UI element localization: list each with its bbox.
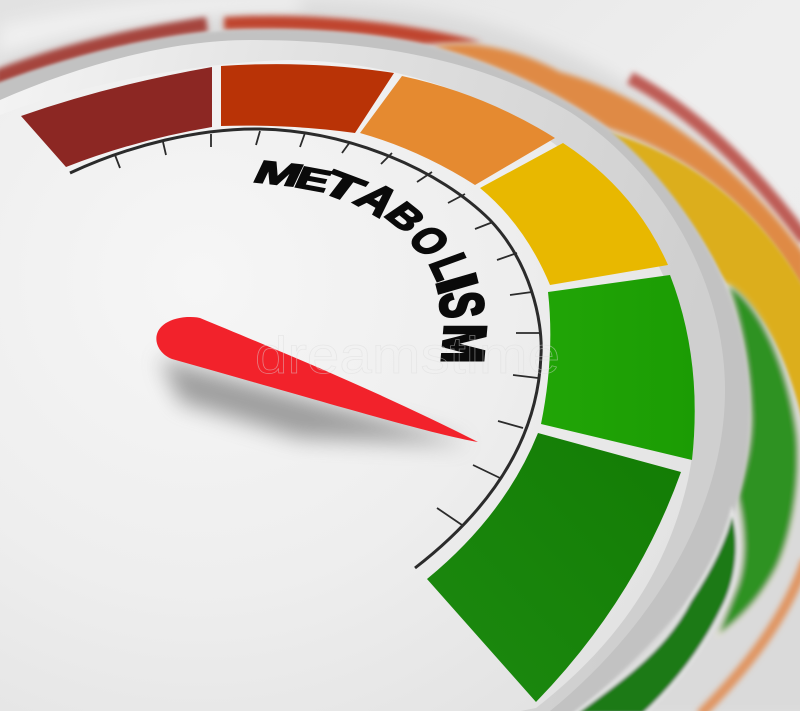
dial face xyxy=(0,60,695,711)
scale arc with ticks xyxy=(70,129,541,568)
segment: dark green xyxy=(427,433,681,702)
needle shadow xyxy=(160,358,470,444)
segment: yellow xyxy=(480,143,668,285)
gauge title: METABOLISM, letters set in perspective along the scale: M xyxy=(248,154,309,193)
segment: dark red xyxy=(21,67,212,167)
blurred dark green band xyxy=(573,511,737,711)
segment: red xyxy=(221,64,394,133)
gauge title: METABOLISM, letters set in perspective along the scale xyxy=(248,154,498,364)
blurred maroon arc xyxy=(630,78,800,240)
watermark: dreamstime xyxy=(255,327,560,385)
needle xyxy=(156,317,478,442)
gauge title: METABOLISM, letters set in perspective along the scale: A xyxy=(345,174,410,225)
gauge title: METABOLISM, letters set in perspective along the scale: T xyxy=(313,163,374,210)
blurred dark red arc xyxy=(0,17,208,88)
blurred yellow band xyxy=(607,132,800,430)
blurred green band xyxy=(717,284,799,636)
gauge title: METABOLISM, letters set in perspective along the scale: M xyxy=(429,324,498,364)
gauge title: METABOLISM, letters set in perspective along the scale: S xyxy=(427,289,496,320)
blurred orange band xyxy=(433,44,800,296)
gauge title: METABOLISM, letters set in perspective along the scale: E xyxy=(290,160,336,199)
blurred lower orange arc xyxy=(700,560,800,711)
gauge title: METABOLISM, letters set in perspective along the scale: L xyxy=(418,247,481,286)
gauge title: METABOLISM, letters set in perspective along the scale: O xyxy=(398,218,460,264)
colour segments xyxy=(21,64,695,702)
gauge title: METABOLISM, letters set in perspective along the scale: I xyxy=(424,267,489,300)
gauge title: METABOLISM, letters set in perspective along the scale: B xyxy=(376,196,434,239)
segment: orange xyxy=(360,76,555,185)
segment: green xyxy=(541,275,695,460)
blurred red arc xyxy=(224,16,482,44)
